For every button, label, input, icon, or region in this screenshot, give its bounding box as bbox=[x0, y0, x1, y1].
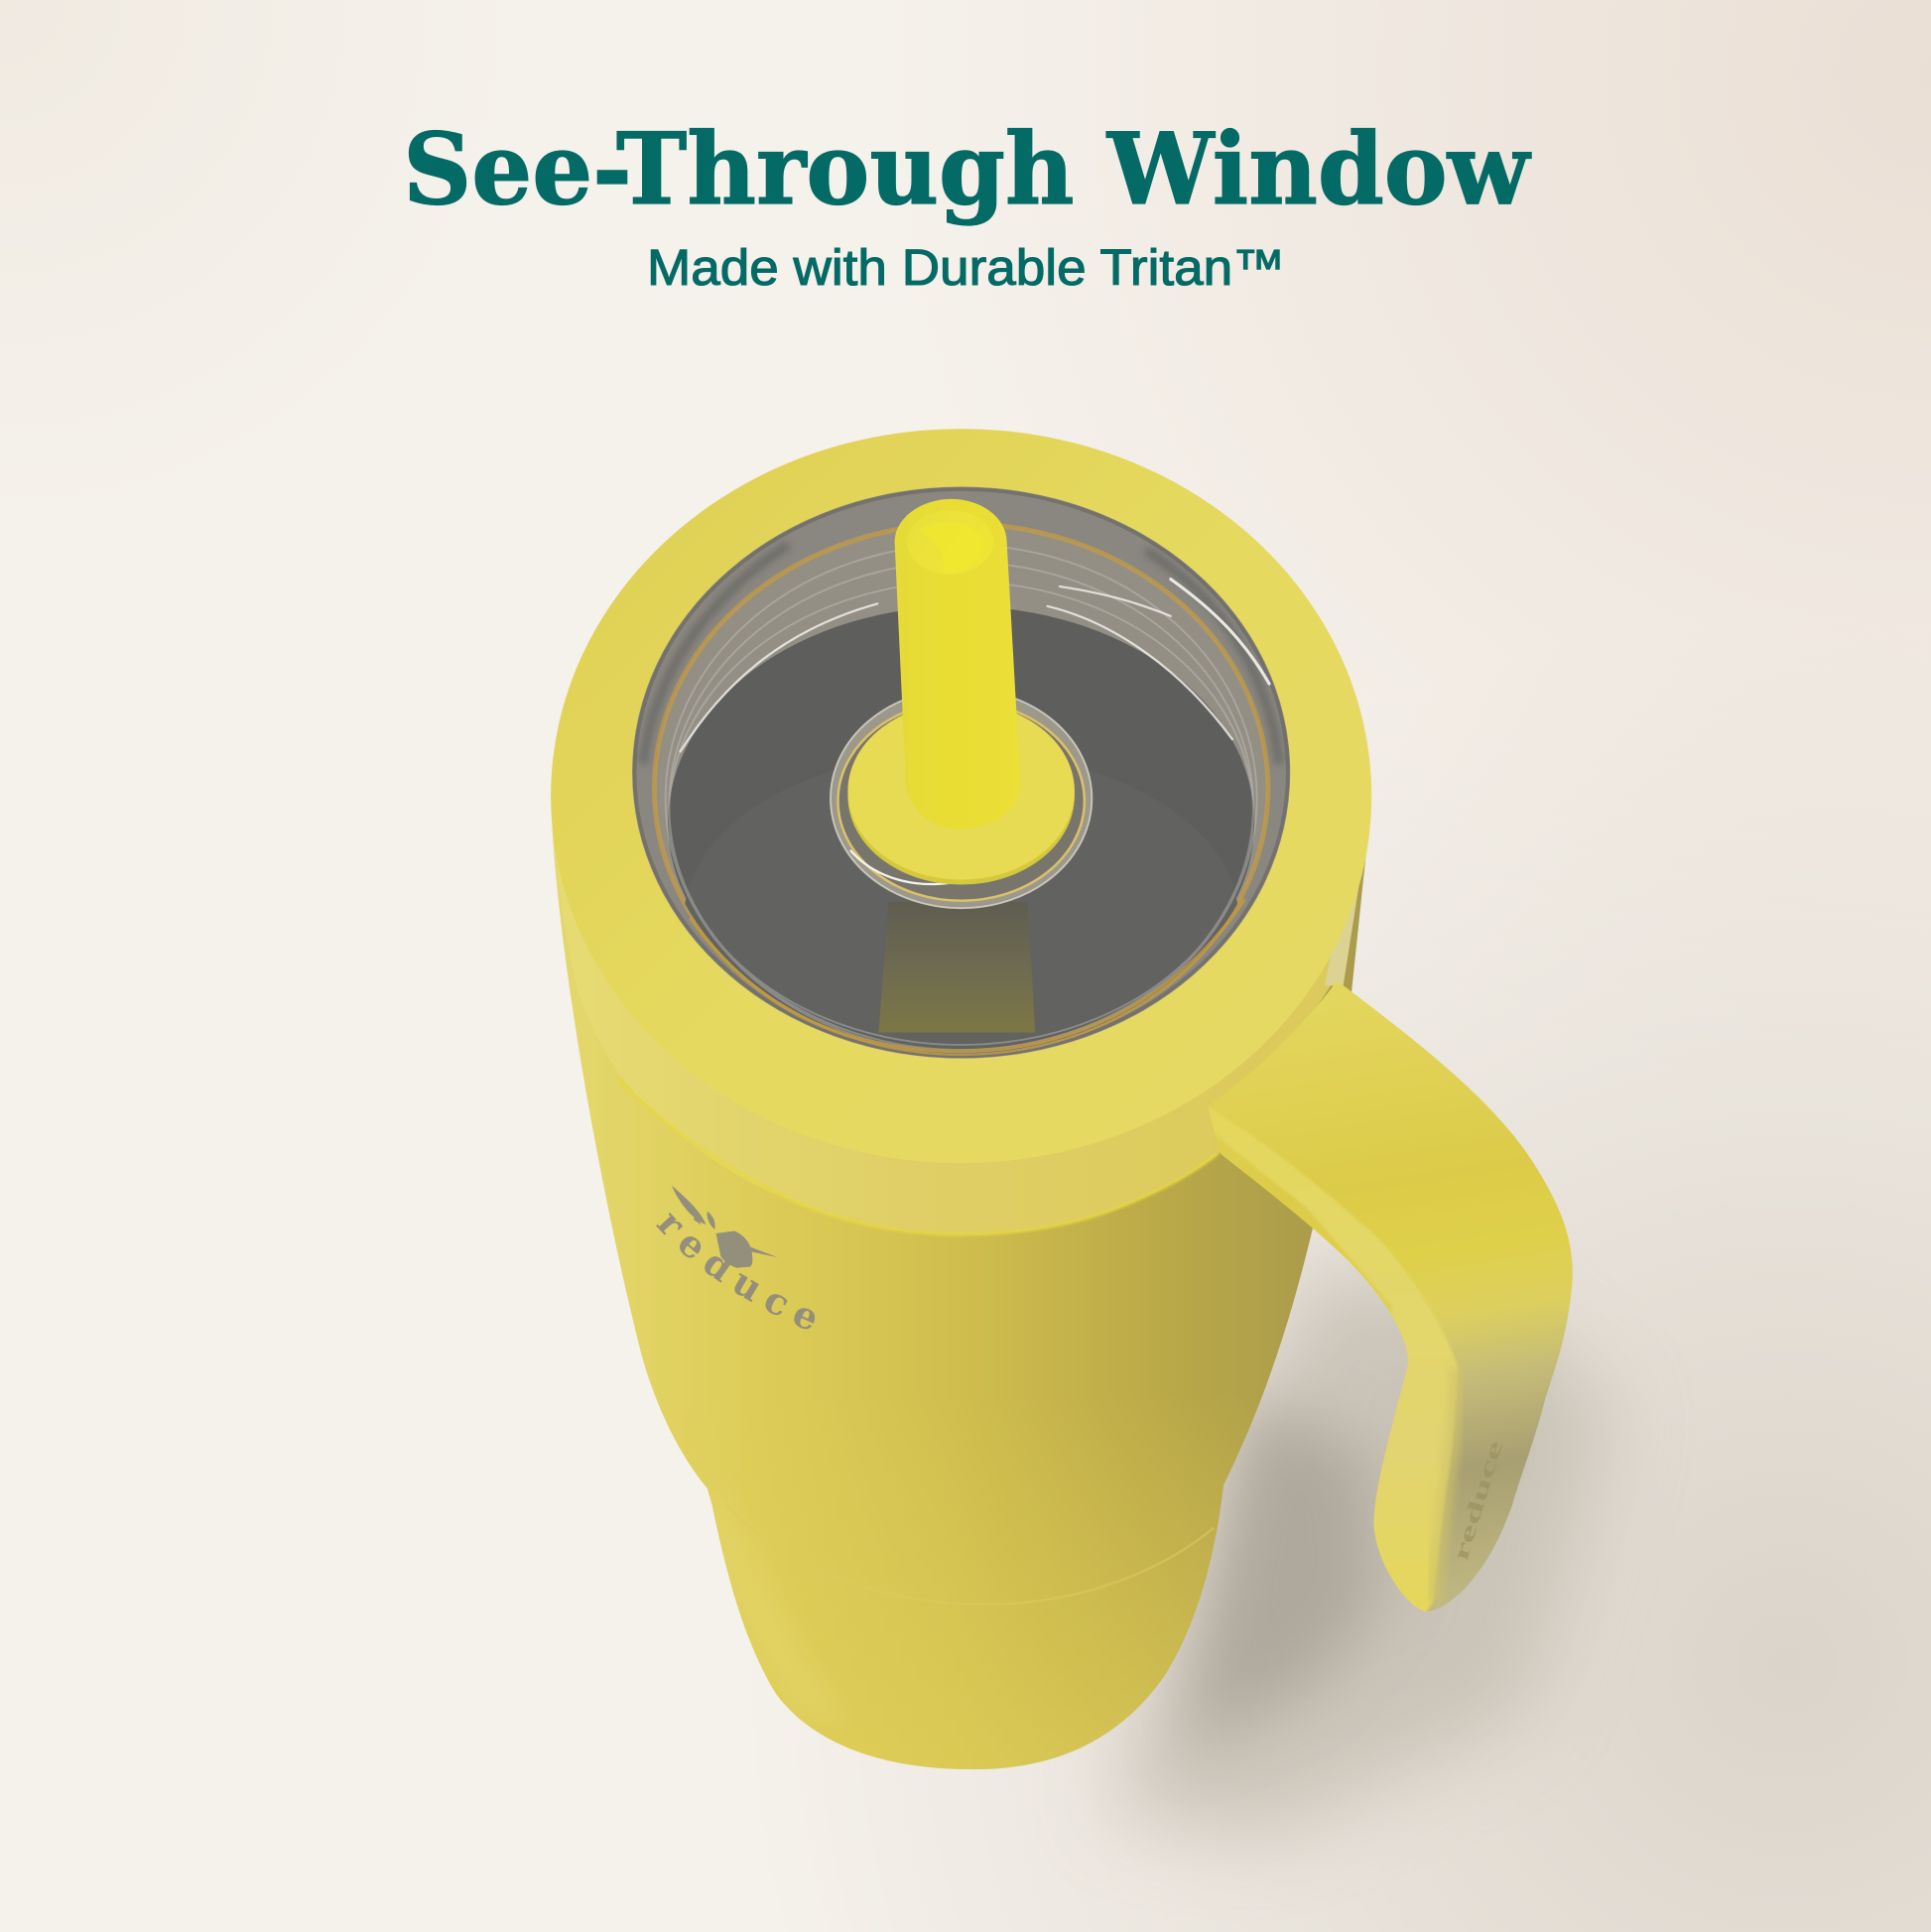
straw opening bbox=[907, 510, 993, 575]
subtitle: Made with Durable Tritan™ bbox=[647, 239, 1285, 296]
orange lid ring bbox=[654, 524, 1268, 1054]
straw base disc bbox=[847, 703, 1075, 885]
rim bbox=[551, 429, 1371, 1163]
straw bbox=[895, 499, 1020, 830]
pale collar sliver right bbox=[1325, 887, 1359, 986]
lid opening bbox=[632, 486, 1290, 1085]
dark crescents on glass bbox=[643, 545, 1279, 764]
glass highlight on outer edge bbox=[1169, 578, 1271, 686]
handle inner face bbox=[1210, 1112, 1458, 1611]
straw tube bbox=[895, 499, 1020, 830]
title: See-Through Window bbox=[403, 112, 1532, 227]
tumbler body bbox=[542, 789, 1380, 1774]
yellow tumbler bbox=[551, 429, 1573, 1770]
handle engraved wordmark: reduce bbox=[1449, 1438, 1507, 1564]
logo wordmark bbox=[656, 1224, 850, 1348]
left edge soft highlight bbox=[730, 1542, 824, 1709]
handle top and side face bbox=[1209, 980, 1573, 1611]
tumbler base highlight bbox=[720, 1503, 1221, 1769]
glass ridges bbox=[666, 545, 1257, 1052]
tumbler step ridge bbox=[1064, 1527, 1215, 1596]
logo bird bbox=[672, 1186, 778, 1268]
straw inner shade bbox=[918, 522, 983, 575]
handle edge blend bbox=[1433, 1367, 1458, 1602]
reduce logo: reduce bbox=[656, 1213, 816, 1330]
tumbler collar bbox=[552, 831, 1331, 1234]
interior lower floor bbox=[666, 545, 1257, 1085]
tumbler shadow bbox=[1109, 1269, 1614, 1836]
white glass highlights bbox=[681, 586, 1232, 751]
dark cup interior bbox=[668, 606, 1254, 1040]
handle bbox=[1209, 980, 1573, 1611]
glass dark rim edge bbox=[635, 489, 1288, 1056]
bottom amber glass edge bbox=[690, 899, 1244, 1051]
collar edge bbox=[616, 1078, 1219, 1234]
glass outer bbox=[632, 486, 1290, 1059]
straw reflection bbox=[878, 902, 1035, 1033]
reduce logo bbox=[656, 1185, 816, 1330]
straw base glass ring bbox=[831, 689, 1092, 908]
